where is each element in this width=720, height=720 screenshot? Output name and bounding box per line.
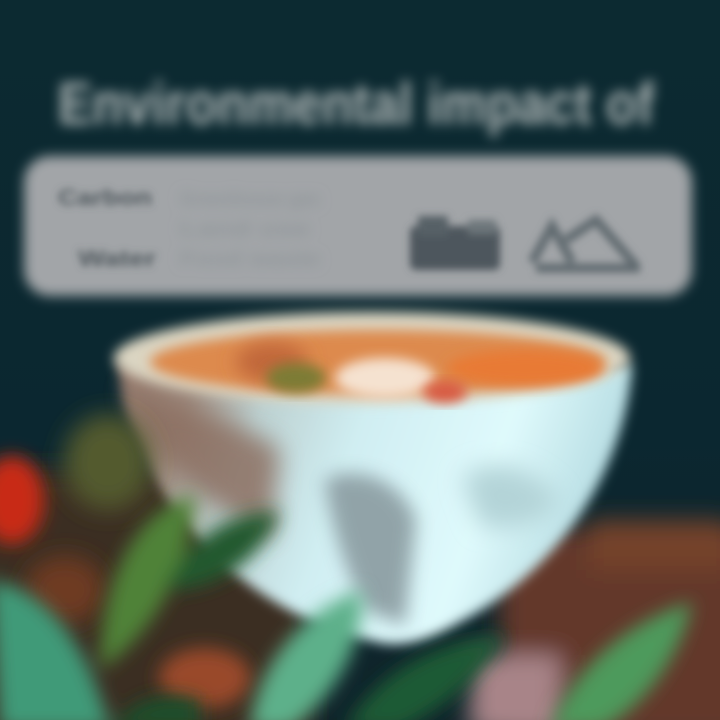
soup tomato <box>423 381 467 403</box>
panel text: middle column: Food waste <box>180 249 320 269</box>
icon: chart light <box>532 220 640 268</box>
icon: chart dark <box>410 216 500 270</box>
blurred olive vegetable <box>64 414 152 510</box>
table surface <box>0 470 720 720</box>
bowl body <box>118 360 632 644</box>
soup surface <box>150 330 606 394</box>
panel text: left column: Water <box>78 246 157 271</box>
panel: information card <box>24 156 692 296</box>
blurred red vegetable <box>25 556 105 624</box>
panel text: middle column: Land use <box>180 219 310 239</box>
bowl <box>114 312 632 644</box>
leaf: back left <box>100 495 195 670</box>
bowl shadow left <box>125 385 280 540</box>
panel text: middle column <box>180 189 320 269</box>
soup highlight <box>447 350 603 386</box>
leaves <box>0 495 692 720</box>
bowl pattern: left motif <box>325 473 416 625</box>
panel text: left column <box>58 185 157 271</box>
panel text: middle column: Greenhouse gas <box>180 189 320 209</box>
soup cream <box>335 358 435 398</box>
bowl rim <box>114 312 630 404</box>
panel text: left column: Carbon <box>58 185 152 210</box>
soup vegetables <box>236 342 308 382</box>
leaf: right <box>550 602 692 720</box>
soup herb <box>266 363 326 393</box>
leaf: back centre <box>165 512 280 590</box>
bowl pattern: right motif <box>462 466 560 527</box>
leaf: large teal left <box>0 580 110 720</box>
leaf: dark lower left <box>110 696 200 720</box>
blurred orange vegetable <box>159 648 251 708</box>
leaf: centre mint <box>250 590 362 720</box>
tomato <box>0 456 44 544</box>
leaf: dark centre <box>345 635 505 720</box>
